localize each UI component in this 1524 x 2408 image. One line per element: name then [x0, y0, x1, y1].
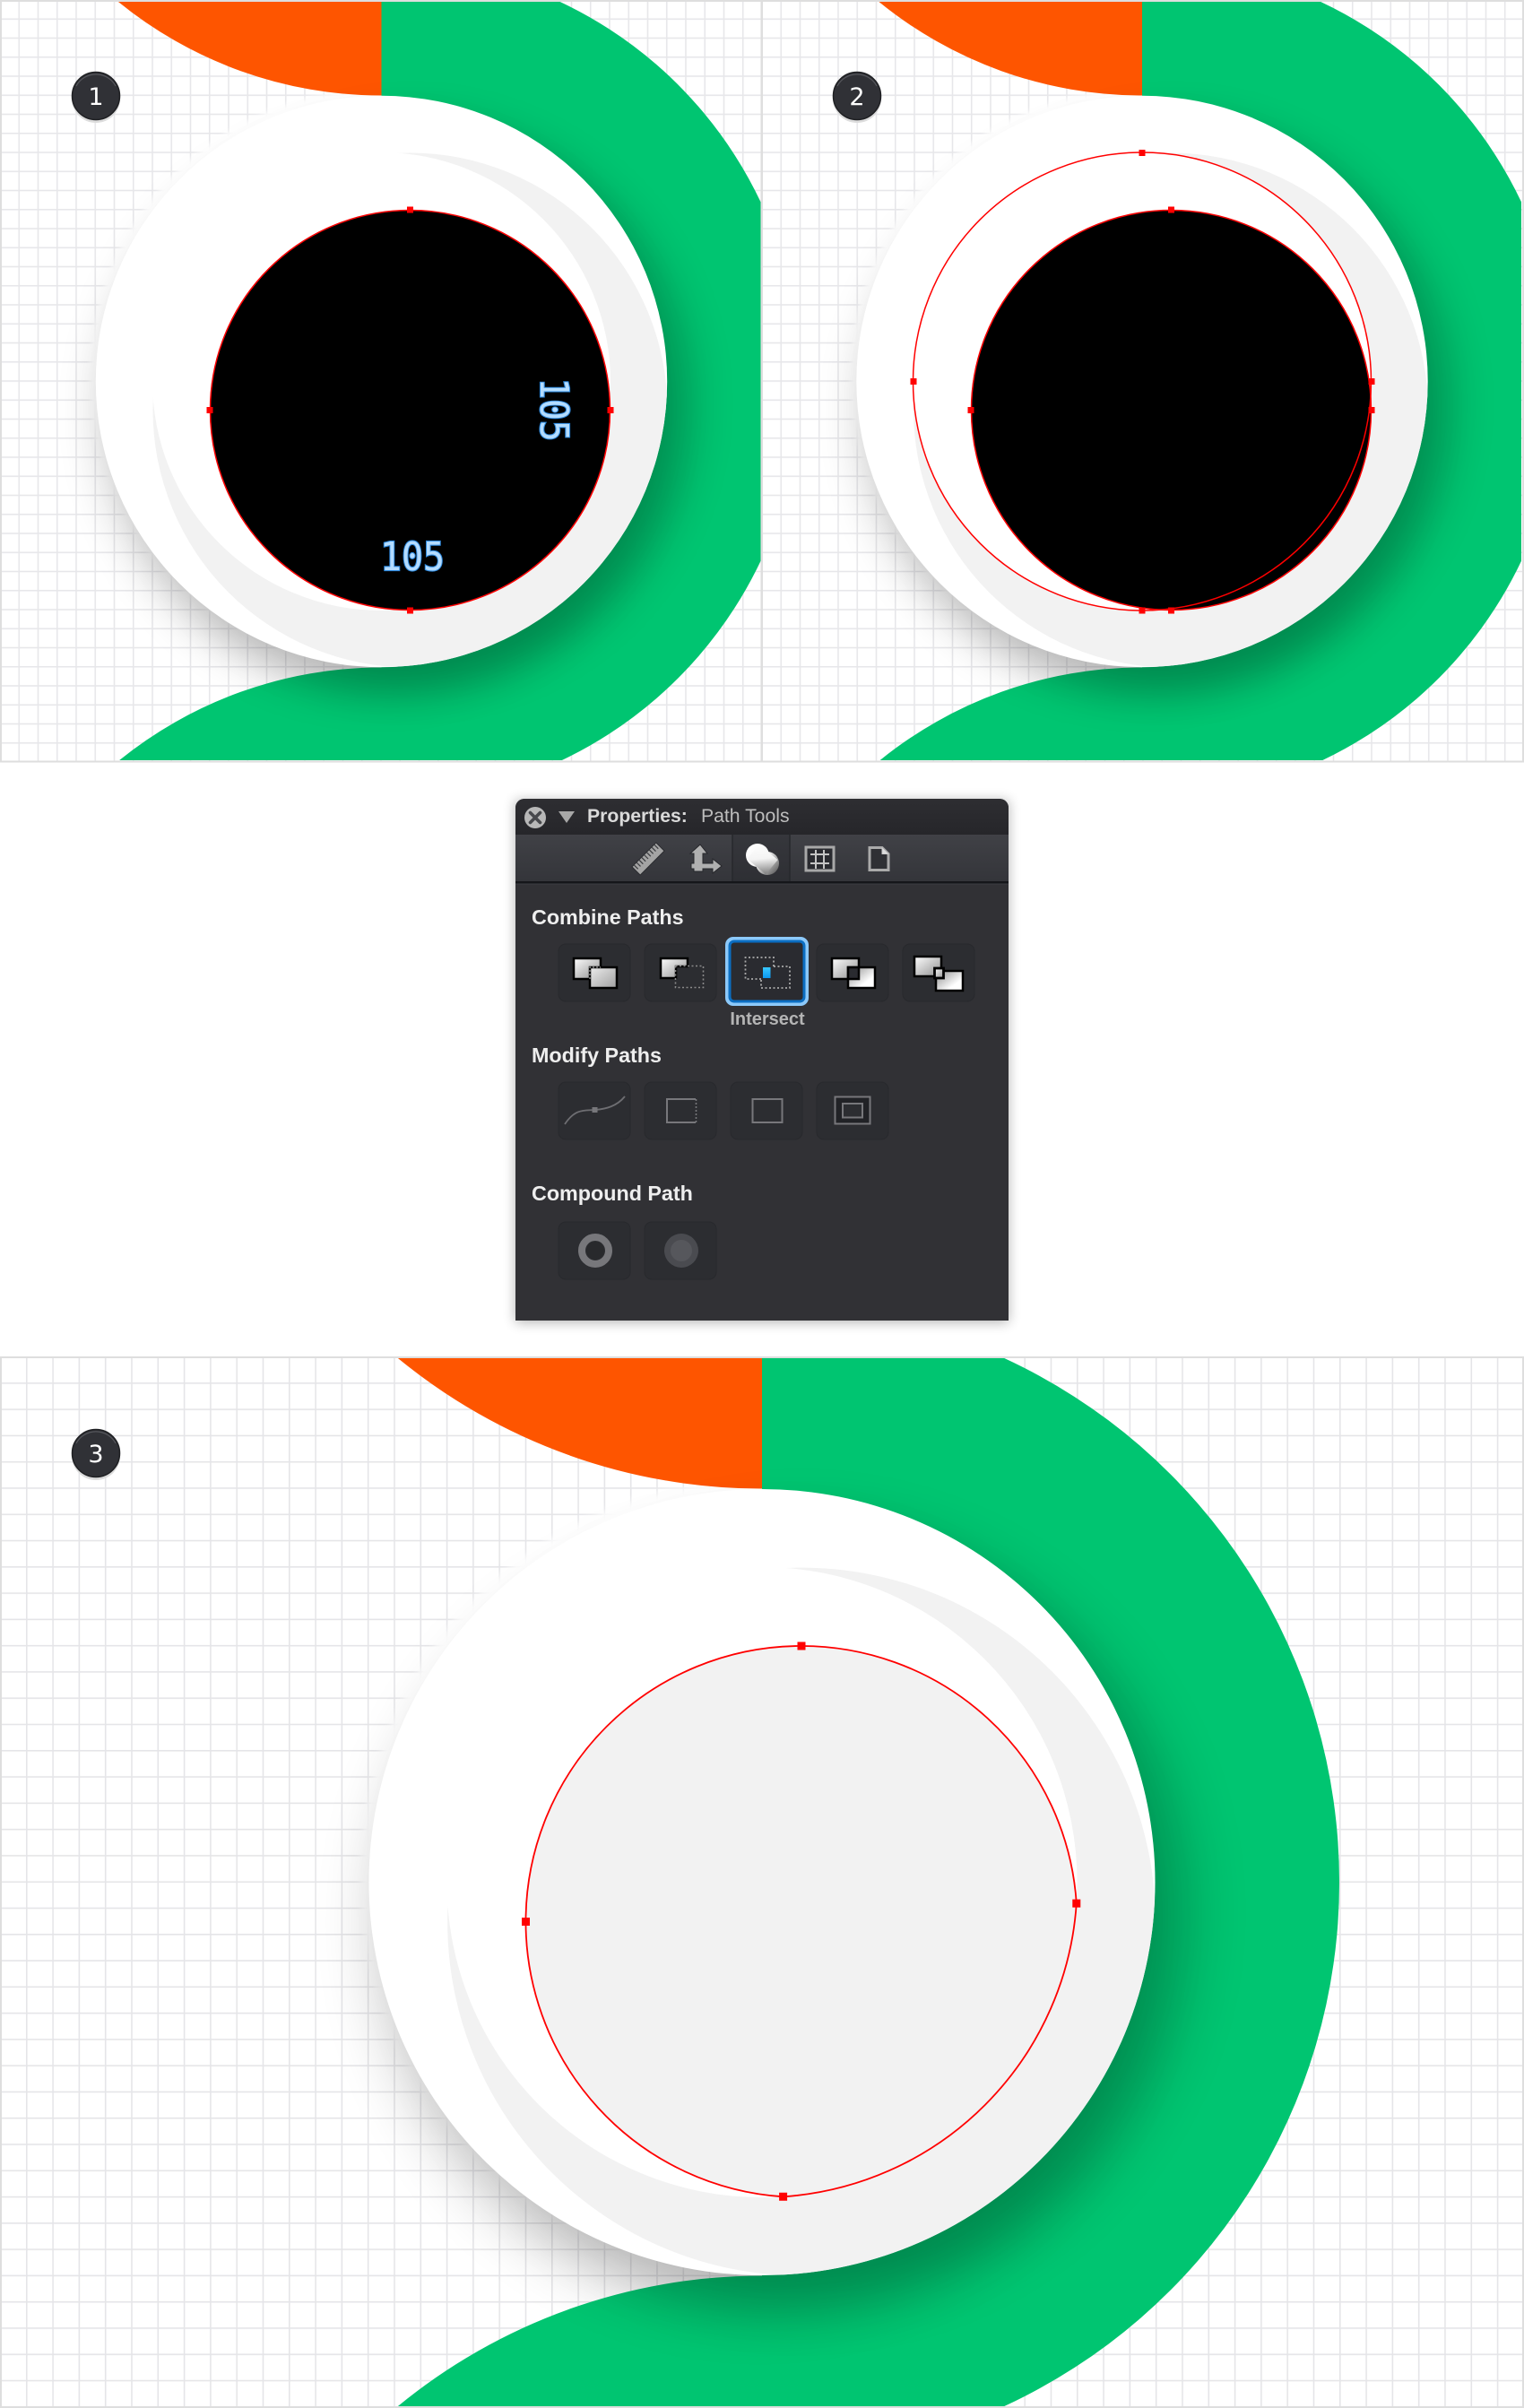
button: unite: [559, 944, 630, 1001]
panel 1 frame: [1, 1, 762, 762]
anchor points 1: [206, 206, 613, 613]
subtitle text: Path Tools: [701, 806, 790, 827]
icon: page: [870, 848, 888, 870]
title bar: [515, 799, 1009, 835]
button: make compound: [559, 1222, 630, 1279]
panel 1: circle with black 105 circle: [0, 0, 801, 763]
panel 2: two overlapping circles: [762, 0, 1524, 763]
artwork 3: [360, 1357, 1339, 2407]
grid background 3: [0, 1356, 1524, 2408]
grid background 1: [0, 0, 762, 762]
anchor points 3: [522, 1642, 1080, 2201]
step badge 3: 3: [88, 1441, 104, 1468]
icon: path tools circles: [746, 844, 779, 875]
tooltip label: Intersect: Intersect: [730, 1009, 805, 1029]
button: exclude: [817, 944, 888, 1001]
step badge 1: 1: [88, 83, 104, 111]
red outline circle: [913, 152, 1372, 611]
dimension label: right 105: 105: [531, 378, 576, 441]
button row: combine paths: [559, 939, 974, 1004]
grid background 2: [762, 0, 1524, 762]
button: curve: [559, 1082, 630, 1139]
dimension label: bottom 105: 105: [380, 534, 445, 580]
title text: Properties:: [587, 806, 688, 827]
toolbar: [515, 835, 1009, 884]
step badge 2: [833, 72, 881, 123]
artwork 2: [850, 0, 1524, 763]
button: intersect selected: [727, 939, 807, 1004]
heading: Compound Path: Compound Path: [532, 1182, 693, 1205]
icon: ruler: [632, 843, 664, 875]
close button: [524, 807, 546, 828]
icon: move arrows: [690, 845, 722, 873]
button: minus front: [645, 944, 716, 1001]
heading: Modify Paths: Modify Paths: [532, 1044, 662, 1067]
step badge 3: [72, 1429, 120, 1480]
intersected lens shape with red outline: [525, 1646, 1077, 2196]
button row: compound path: [559, 1222, 716, 1279]
anchor points 2: [911, 150, 1375, 613]
button: divide: [903, 944, 974, 1001]
artwork 1: [90, 0, 801, 763]
step badge 2: 2: [849, 83, 865, 111]
collapse triangle: [559, 811, 575, 823]
button row: modify paths: [559, 1082, 888, 1139]
black circle with red outline: [210, 210, 610, 610]
heading: Combine Paths: Combine Paths: [532, 905, 684, 929]
button: closed rectangle: [731, 1082, 802, 1139]
button: offset rectangle: [817, 1082, 888, 1139]
step badge 1: [72, 72, 120, 123]
icon: grid: [806, 847, 834, 871]
panel 2 frame: [762, 1, 1523, 762]
panel 3 frame: [1, 1357, 1523, 2407]
panel 3: intersected result: [0, 1356, 1524, 2408]
properties panel: Path Tools: [515, 799, 1009, 1322]
button: open rectangle: [645, 1082, 716, 1139]
black circle 2: [972, 210, 1372, 610]
button: release compound: [645, 1222, 716, 1279]
